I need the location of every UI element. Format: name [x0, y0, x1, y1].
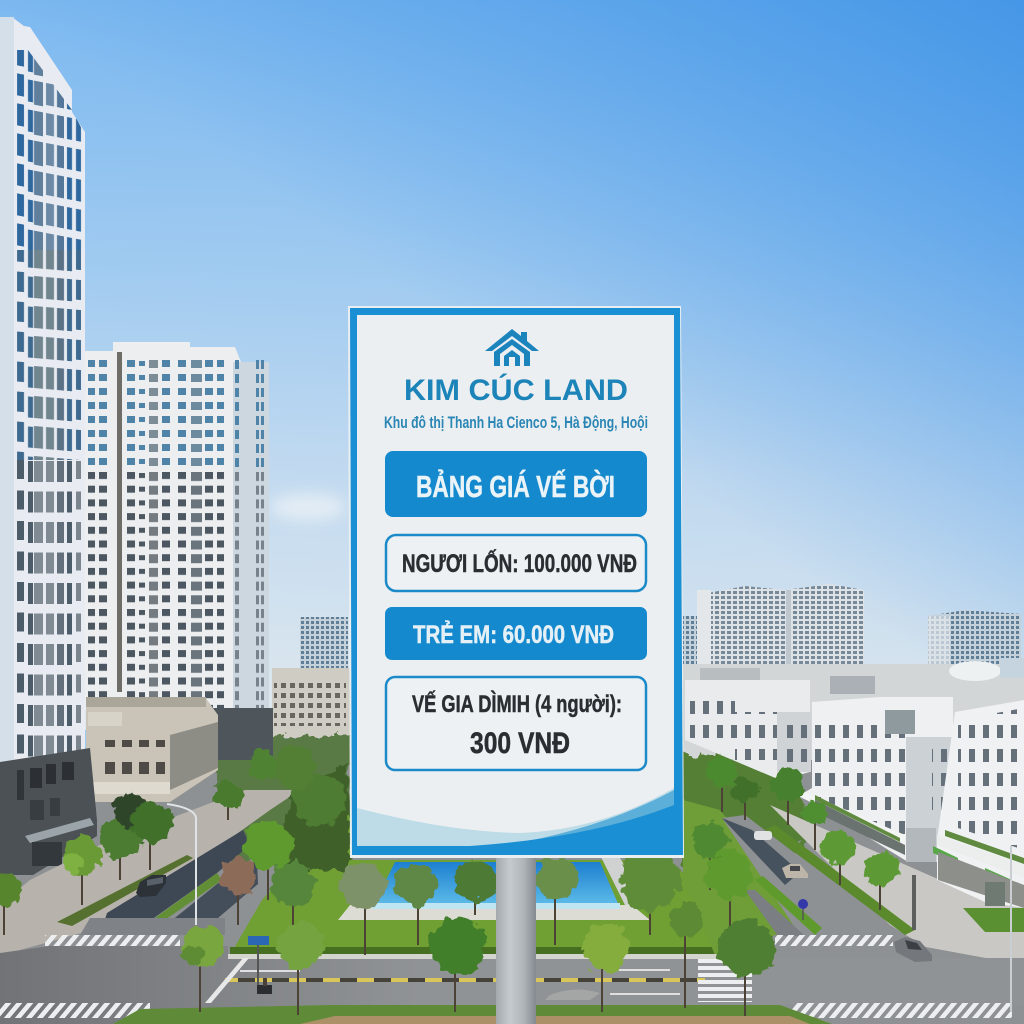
car white right upper — [754, 831, 772, 840]
sign pole — [496, 855, 536, 1024]
right lawn — [683, 800, 820, 955]
bottom hedge and soil — [113, 1005, 832, 1024]
road sign round — [798, 899, 808, 920]
left tower dark base — [0, 748, 97, 875]
tree crowns — [0, 746, 899, 977]
adult price box — [386, 535, 646, 591]
traffic light pole — [912, 875, 916, 930]
distant towers right — [683, 584, 1021, 676]
sign blue border — [350, 308, 683, 855]
heading band — [385, 451, 647, 517]
sky background — [0, 0, 1024, 730]
family price box: VẾ GIA DÌMIH (4 người): — [412, 690, 622, 718]
main cross road — [0, 946, 1024, 1024]
distant city band — [683, 658, 1024, 774]
motorbike — [257, 978, 272, 994]
swimming pool — [338, 855, 650, 920]
child price box: TRẺ EM: 60.000 VNĐ — [413, 619, 614, 649]
sign mid wave — [357, 790, 674, 846]
sign outer frame — [348, 306, 684, 858]
street lamp right — [1010, 846, 1012, 1012]
heading band: BẢNG GIÁ VẾ BỜI — [416, 468, 615, 504]
sign pale wave — [357, 788, 674, 846]
tree trunks — [4, 780, 880, 1016]
lawn central — [230, 760, 720, 956]
child price box — [385, 607, 647, 660]
white low-rise group A — [685, 680, 811, 780]
address: Khu đô thị Thanh Ha Cienco 5, Hà Động, Hoội — [384, 413, 648, 432]
sign blue wave — [357, 805, 674, 846]
sign inner panel — [357, 315, 674, 846]
distant towers left — [272, 617, 350, 738]
crosswalks — [0, 935, 1012, 1018]
cloud — [270, 493, 346, 521]
adult price box: NGƯƠI LỐN: 100.000 VNĐ — [402, 548, 637, 578]
right sidewalk — [770, 805, 1024, 968]
car silver right — [782, 864, 808, 878]
brand name: KIM CÚC LAND — [404, 373, 628, 407]
beige low-rise building — [86, 697, 218, 802]
street lamp left — [167, 804, 196, 925]
right road lanes — [720, 815, 1024, 1005]
street sign blue — [248, 936, 269, 985]
family price box — [386, 677, 646, 770]
white low-rise group B — [800, 697, 954, 862]
left tall tower — [0, 17, 85, 770]
price sign board — [348, 306, 684, 858]
middle tower — [85, 342, 273, 760]
right tree backdrop — [683, 755, 810, 880]
icon: house logo — [485, 329, 539, 366]
car grey junction — [894, 937, 932, 962]
car dark left — [136, 875, 166, 897]
family price box: 300 VNĐ — [470, 727, 570, 760]
left sidewalks and plaza — [0, 790, 300, 955]
white low-rise group C — [933, 700, 1024, 908]
left road lanes — [57, 830, 258, 935]
left tree backdrop — [150, 735, 352, 860]
ground base — [0, 760, 1024, 1024]
